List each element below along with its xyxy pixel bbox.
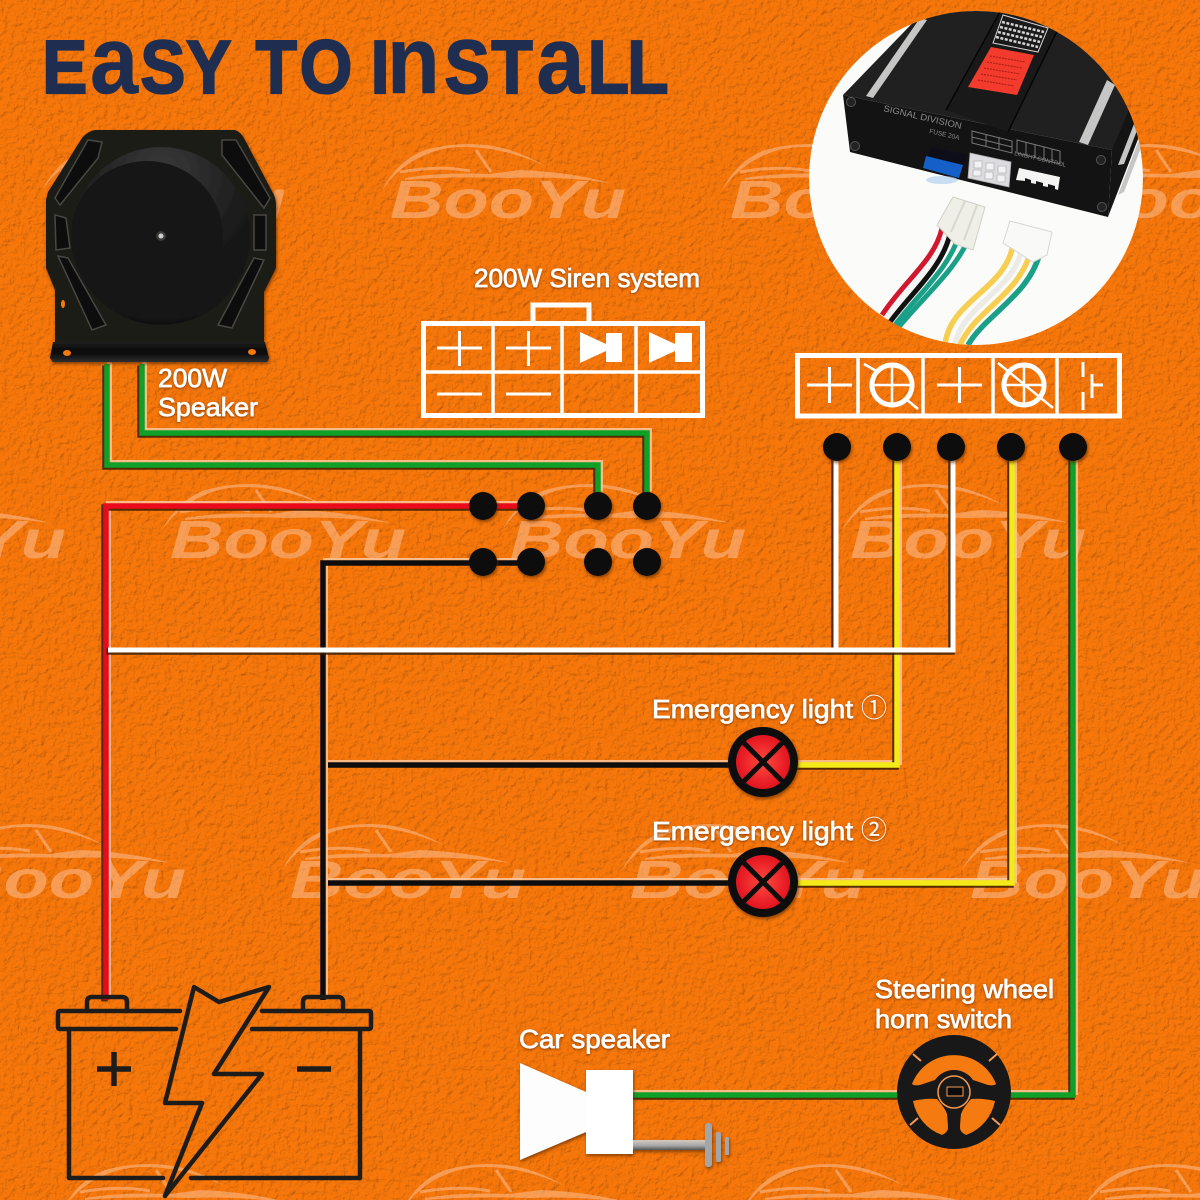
BooYu watermarks: BooYu (390, 170, 626, 230)
title: O (300, 26, 352, 110)
warning label (968, 47, 1034, 95)
label: steering wheel horn switch: Steering wheel (875, 974, 1054, 1004)
icon: emergency light 2 (728, 847, 798, 917)
battery minus sign (297, 1066, 331, 1072)
symbols: positive terminals (437, 331, 551, 366)
label: 200W Siren system: 200W Siren system (474, 263, 700, 293)
BooYu watermarks: BooYu (50, 170, 286, 230)
title: Y (186, 26, 231, 110)
icon: car speaker (520, 1063, 729, 1167)
icon: battery (58, 987, 371, 1196)
battery plus sign (97, 1052, 131, 1086)
title: S (140, 26, 185, 110)
label: steering wheel horn switch (875, 974, 1054, 1034)
fuse and sockets (923, 152, 1060, 190)
BooYu watermarks: BooYu (170, 510, 406, 570)
BooYu watermarks: BooYu (510, 510, 746, 570)
wire: speaker green 1 (106, 362, 600, 496)
BooYu watermarks: BooYu (970, 850, 1200, 910)
icon: 200W speaker (46, 130, 276, 362)
symbol: switch (1083, 362, 1103, 410)
wire: speaker green 2 (140, 362, 650, 496)
connection dots (469, 433, 1087, 576)
label: emergency light 2: ② (861, 815, 887, 845)
label: steering wheel horn switch: horn switch (875, 1004, 1012, 1034)
photo: siren amplifier and plugs (809, 5, 1160, 345)
label: emergency light 2: Emergency light (652, 816, 854, 846)
wiring (104, 362, 1076, 1096)
wire: light 2 ground (328, 880, 735, 883)
wire: battery negative black (323, 560, 532, 1000)
wire: light 1 yellow (788, 444, 900, 766)
control connector diagram (798, 355, 1120, 416)
label: car speaker: Car speaker (519, 1024, 670, 1054)
wire: light 1 ground (328, 762, 735, 765)
symbols: plus (807, 367, 982, 403)
wire: power white (106, 447, 953, 652)
title: n (387, 7, 440, 114)
symbol: lamp 1 (864, 364, 918, 409)
label: emergency light 1: Emergency light (652, 694, 854, 724)
title: E (42, 26, 87, 110)
amplifier body: SIGNAL DIVISION (883, 103, 963, 131)
title: T (256, 26, 297, 110)
title: S (445, 26, 490, 110)
title: I (371, 26, 390, 110)
wire: horn switch green (628, 444, 1076, 1096)
siren system connector diagram (424, 305, 702, 416)
BooYu watermarks: BooYu (290, 850, 526, 910)
title: a (536, 7, 586, 114)
wire: light 2 yellow (788, 444, 1014, 884)
wire: battery positive red (104, 504, 532, 1002)
siren plug and wires (882, 197, 985, 328)
title: L (627, 26, 669, 110)
amplifier body: LINGHT CONTROL (1014, 151, 1067, 169)
amplifier body: FUSE 20A (929, 128, 961, 142)
light plug and wires (945, 221, 1052, 345)
label: emergency light 1: ① (861, 693, 887, 723)
symbol: lamp 2 (998, 363, 1053, 408)
icon: steering wheel (897, 1035, 1011, 1149)
BooYu watermarks: BooYu (630, 850, 866, 910)
BooYu watermarks: BooYu (850, 510, 1086, 570)
amplifier body (843, 5, 1160, 217)
symbols: negative terminals (437, 392, 551, 396)
icon: emergency light 1 (728, 727, 798, 797)
label: 200W Speaker: Speaker (158, 392, 258, 422)
title: L (588, 26, 629, 110)
label: 200W Speaker: 200W (158, 363, 227, 393)
BooYu watermarks: BooYu (730, 170, 966, 230)
label: 200W Speaker (158, 363, 258, 422)
information label (993, 15, 1048, 52)
symbols: speaker outputs (580, 332, 692, 363)
title: T (491, 26, 533, 110)
lightning bolt (165, 987, 269, 1196)
title: a (90, 7, 139, 114)
